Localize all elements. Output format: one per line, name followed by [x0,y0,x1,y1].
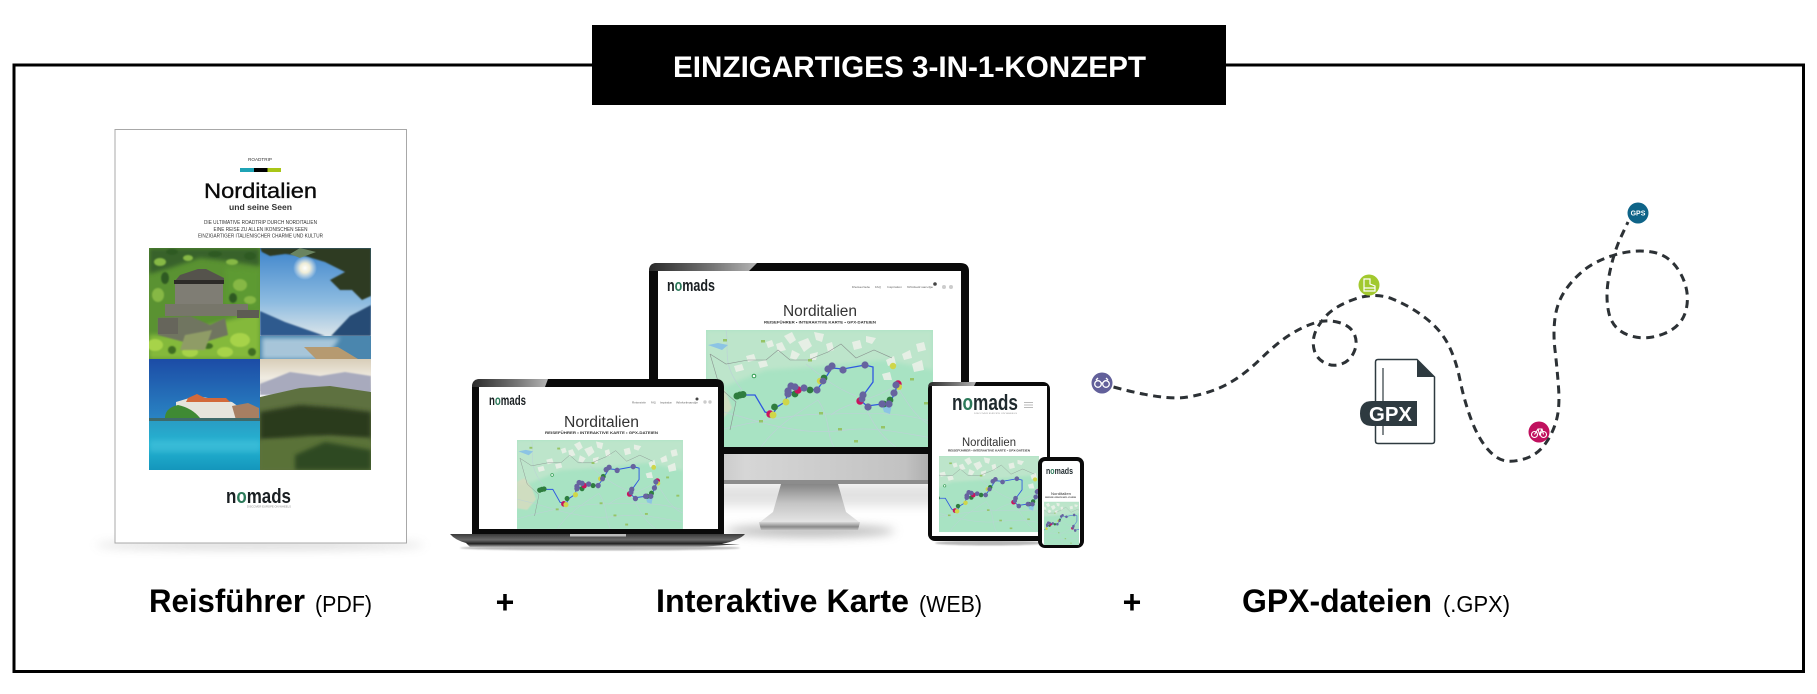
device: laptop with interactive map [450,379,745,550]
label: GPX-dateien GPX: GPX-dateien [1242,583,1432,619]
label: Reisefuehrer PDF: Reisführer [149,583,305,619]
label: Interaktive Karte WEB: (WEB) [919,591,982,617]
laptop navigation: Reiseziele [632,402,647,404]
monitor navigation: Winkelmandje [907,285,933,289]
phone page subtitle: REISEFÜHRER • INTERAKTIVE KARTE • GPX-DATEIEN [1045,496,1077,499]
book description: DIE ULTIMATIVE ROADTRIP DURCH NORDITALIEN [204,220,317,226]
tablet menu icon [1024,402,1033,408]
icon: bicycle marker [1528,422,1550,442]
phone map [1044,501,1079,545]
icon: GPS marker: GPS [1631,210,1646,218]
monitor page subtitle: REISEFÜHRER • INTERAKTIVE KARTE • GPX-DATEIEN [764,320,876,324]
laptop navigation [632,398,712,404]
title banner [592,25,1226,105]
icon: hiking boot marker [1358,274,1380,296]
monitor site logo: nomads [667,276,715,295]
tablet site logo: DISCOVER EUROPE ON WHEELS [974,413,1018,415]
laptop page title: Norditalien [564,414,639,431]
label: Reisefuehrer PDF: (PDF) [315,591,372,617]
tablet site logo: nomads [952,390,1018,415]
laptop page subtitle: REISEFÜHRER • INTERAKTIVE KARTE • GPX-DATEIEN [545,430,658,435]
icon: GPX file: GPX [1369,404,1413,426]
plus sign 2: + [1123,584,1141,620]
phone site logo: nomads [1046,466,1073,477]
book description [198,220,323,240]
book colour bar [240,168,281,172]
photo: green hills and mountains [260,359,371,470]
title banner: EINZIGARTIGES 3-IN-1-KONZEPT [673,51,1146,84]
dashed GPS route [1114,222,1687,461]
icon: GPX file [1360,360,1434,444]
tablet page subtitle: REISEFÜHRER • INTERAKTIVE KARTE • GPX-DATEIEN [948,448,1030,452]
book description: EINE REISE ZU ALLEN IKONISCHEN SEEN [214,227,308,233]
monitor navigation: FAQ [875,285,882,289]
laptop site logo: nomads [489,393,526,408]
monitor navigation [852,282,953,289]
logo: nomads on book: DISCOVER EUROPE ON WHEELS [247,506,291,508]
phone page title: Norditalien [1051,491,1071,496]
book label: roadtrip: ROADTRIP [248,157,272,162]
laptop map [517,440,683,529]
monitor page title: Norditalien [783,303,857,320]
logo: nomads on book: nomads [226,486,291,508]
label: Interaktive Karte WEB: Interaktive Karte [656,583,909,619]
laptop navigation: Winkelmandje [676,402,699,404]
tablet page title: Norditalien [962,437,1016,449]
book title: Norditalien [204,180,317,203]
photo: castle on forested hill [147,248,260,359]
icon: binoculars marker [1092,372,1112,394]
device: phone with interactive map [1038,457,1084,548]
laptop navigation: Inspiration [660,402,673,404]
photo: lake with sun and jetty [260,248,371,359]
laptop navigation: FAQ [651,402,656,404]
icon: GPS marker [1628,202,1648,224]
plus sign 1: + [496,584,514,620]
panel: PDF travel guide book cover [95,130,425,548]
book subtitle: und seine Seen [229,203,292,212]
monitor navigation: Inspiration [887,285,902,289]
label: GPX-dateien GPX: (.GPX) [1443,591,1510,617]
monitor map [706,330,933,447]
device: tablet with interactive map [928,382,1050,546]
photo: island palace in turquoise lake [149,359,260,470]
tablet map [939,456,1039,532]
device: desktop monitor with interactive map [649,263,969,537]
monitor navigation: Reiseziele [852,285,870,289]
book description: EINZIGARTIGER ITALIENISCHER CHARME UND KULTUR [198,234,323,240]
